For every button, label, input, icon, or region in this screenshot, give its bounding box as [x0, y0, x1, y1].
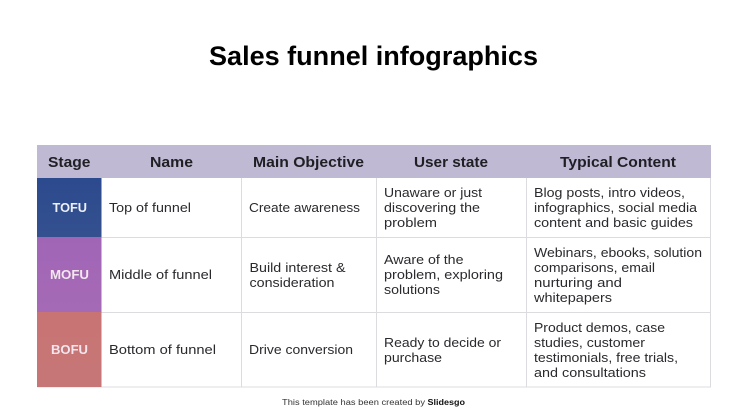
row: MOFU: Webinars, ebooks, solution	[534, 245, 702, 260]
row: MOFU: problem, exploring	[384, 267, 503, 282]
footer credit: This template has been created by	[282, 398, 425, 407]
table header row: Main Objective	[253, 154, 364, 171]
footer credit	[282, 398, 465, 407]
row: BOFU	[37, 312, 678, 387]
row: MOFU: solutions	[384, 282, 441, 297]
row: MOFU: Build interest &	[250, 260, 346, 275]
row: TOFU: TOFU	[52, 201, 87, 215]
row: MOFU: whitepapers	[533, 290, 613, 305]
table header row: User state	[414, 154, 488, 171]
table: sales funnel stages	[37, 145, 711, 387]
row: MOFU	[37, 237, 702, 312]
row: TOFU	[37, 178, 698, 237]
row: BOFU: and consultations	[534, 365, 647, 380]
title: Sales funnel infographics	[209, 41, 538, 71]
row: BOFU: studies, customer	[534, 335, 646, 350]
row: BOFU: Drive conversion	[249, 342, 353, 357]
table header row: Typical Content	[560, 154, 676, 171]
row: MOFU: comparisons, email	[534, 260, 655, 275]
table header row: Stage	[48, 154, 90, 171]
row: TOFU: Unaware or just	[384, 185, 482, 200]
row: TOFU: Blog posts, intro videos,	[534, 185, 685, 200]
footer credit: Slidesgo	[428, 398, 465, 407]
table header row	[37, 145, 711, 178]
row: TOFU: infographics, social media	[534, 200, 698, 215]
row: MOFU: consideration	[250, 275, 334, 290]
row: MOFU: Aware of the	[384, 252, 464, 267]
row: BOFU: testimonials, free trials,	[534, 350, 678, 365]
row: BOFU: BOFU	[51, 343, 88, 357]
row: MOFU: MOFU	[50, 268, 89, 282]
row: TOFU: discovering the	[384, 200, 480, 215]
row: BOFU: Ready to decide or	[384, 335, 502, 350]
table header row: Name	[150, 154, 193, 171]
row: MOFU: Middle of funnel	[109, 267, 212, 282]
row: BOFU: Bottom of funnel	[109, 342, 216, 357]
row: TOFU: Top of funnel	[109, 200, 191, 215]
row: MOFU: nurturing and	[534, 275, 622, 290]
row: BOFU: purchase	[384, 350, 442, 365]
table grid lines	[37, 178, 711, 387]
row: TOFU: problem	[384, 215, 437, 230]
row: BOFU: Product demos, case	[534, 320, 665, 335]
row: TOFU: content and basic guides	[534, 215, 694, 230]
row: TOFU: Create awareness	[249, 200, 361, 215]
